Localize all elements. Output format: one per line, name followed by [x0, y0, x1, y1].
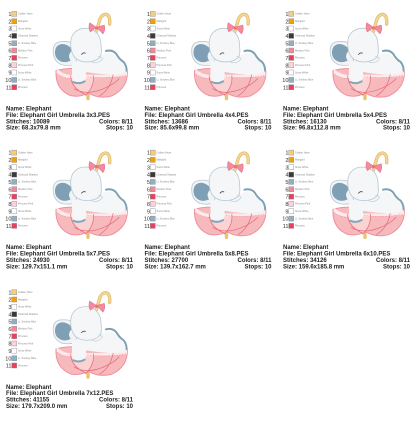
thread colour legend: 9 [8, 209, 12, 215]
thread colour legend: Golden Haze [295, 151, 310, 154]
thread colour legend: 10 [5, 78, 12, 84]
thread colour legend: Princess [156, 57, 167, 60]
thread colour legend: 6 [147, 49, 150, 55]
thread colour legend: Golden Haze [18, 151, 33, 154]
design details: Size: 159.6x185.8 mm [283, 264, 344, 270]
thread colour legend: Princess [156, 195, 167, 198]
thread colour legend: 9 [147, 209, 150, 215]
thread colour legend: Snow White [18, 210, 32, 213]
thread colour legend: 4 [147, 173, 150, 179]
thread colour legend: Golden Haze [18, 13, 33, 16]
design details: Colors: 8/11 [237, 119, 272, 125]
embroidery: elephant in umbrella [192, 153, 266, 237]
design details: Name: Elephant [6, 245, 51, 251]
design details [6, 385, 134, 410]
thread colour legend: 3 [147, 27, 150, 33]
thread colour legend: 1 [8, 290, 12, 296]
thread colour legend: 5 [285, 41, 288, 47]
thread colour legend: Lt. Smokey Blue [18, 357, 37, 360]
thread colour legend: Princess Pink [18, 203, 34, 206]
thread colour legend: Snow White [18, 350, 32, 353]
design details: Stitches: 34126 [283, 258, 327, 264]
design details: Stops: 10 [106, 404, 134, 410]
thread colour legend: Charcoal Shadow [18, 313, 38, 316]
thread colour legend: Golden Haze [156, 151, 172, 154]
thread colour legend [5, 11, 38, 91]
panel: Elephant Girl Umbrella 3x3 [5, 11, 134, 132]
thread colour legend: 1 [8, 12, 12, 18]
thread colour legend: Snow White [156, 166, 170, 169]
thread colour legend: Princess [18, 86, 28, 89]
thread colour legend: Lt. Smokey Blue [18, 320, 37, 323]
thread colour legend: 3 [8, 305, 12, 311]
thread colour legend: 8 [285, 63, 288, 69]
thread colour legend: Lt. Smokey Blue [18, 79, 37, 82]
thread colour legend: Snow White [295, 71, 309, 74]
design details [144, 106, 272, 132]
panel: Elephant Girl Umbrella 5x7 [5, 150, 134, 270]
thread colour legend: Princess [156, 86, 167, 89]
design details: Stops: 10 [244, 264, 272, 270]
thread colour legend: Princess [295, 225, 305, 228]
thread colour legend: Medium Pink [18, 49, 33, 52]
thread colour legend: 4 [8, 312, 12, 318]
thread colour legend: 10 [5, 217, 12, 223]
thread colour legend: 2 [8, 19, 12, 25]
design details: Stitches: 24930 [6, 258, 50, 264]
thread colour legend: 1 [147, 151, 150, 157]
thread colour legend: Marigold [18, 20, 28, 23]
design details: File: Elephant Girl Umbrella 3x3.PES [6, 113, 110, 119]
embroidery: elephant in umbrella [330, 153, 404, 237]
thread colour legend: Snow White [295, 166, 309, 169]
thread colour legend: Marigold [295, 20, 305, 23]
panel: Elephant Girl Umbrella 6x10 [282, 150, 411, 270]
thread colour legend: Princess [156, 225, 167, 228]
thread colour legend: 10 [282, 217, 288, 223]
thread colour legend: Marigold [156, 20, 167, 23]
thread colour legend: 11 [283, 85, 288, 91]
thread colour legend: Princess Pink [18, 342, 34, 345]
design details: Colors: 8/11 [237, 258, 272, 264]
thread colour legend: Medium Pink [18, 188, 33, 191]
thread colour legend: Snow White [295, 27, 309, 30]
design details: Size: 96.8x112.8 mm [283, 126, 341, 132]
thread colour legend [282, 150, 315, 230]
design details: Stitches: 13686 [144, 119, 189, 125]
thread colour legend: 9 [147, 71, 150, 77]
thread colour legend: 9 [8, 349, 12, 355]
thread colour legend: 7 [147, 195, 150, 201]
thread colour legend: Snow White [156, 71, 170, 74]
thread colour legend [5, 150, 38, 230]
design details: Stops: 10 [106, 264, 134, 270]
thread colour legend: 10 [144, 217, 150, 223]
design details: File: Elephant Girl Umbrella 5x4.PES [283, 113, 387, 119]
design details: Size: 85.6x99.8 mm [144, 126, 199, 132]
design details: Colors: 8/11 [99, 119, 134, 125]
thread colour legend: 6 [8, 187, 12, 193]
thread colour legend [144, 150, 176, 230]
thread colour legend: Snow White [18, 166, 32, 169]
thread colour legend: 6 [285, 187, 288, 193]
thread colour legend: Charcoal Shadow [295, 35, 315, 38]
panel: Elephant Girl Umbrella 5x4 [282, 11, 411, 132]
thread colour legend: 8 [147, 63, 150, 69]
thread colour legend: 2 [285, 19, 288, 25]
thread colour legend [144, 11, 176, 91]
thread colour legend: Charcoal Shadow [295, 173, 315, 176]
thread colour legend: 9 [285, 71, 288, 77]
thread colour legend: 1 [285, 12, 288, 18]
thread colour legend: 8 [8, 202, 12, 208]
thread colour legend: Charcoal Shadow [18, 173, 38, 176]
panel: Elephant Girl Umbrella 5x8 [144, 150, 272, 270]
thread colour legend: 2 [285, 158, 288, 164]
thread colour legend: 4 [8, 173, 12, 179]
thread colour legend: Princess [18, 57, 28, 60]
thread colour legend: Princess [295, 195, 305, 198]
thread colour legend: 3 [285, 27, 288, 33]
thread colour legend: Snow White [156, 210, 170, 213]
thread colour legend: Golden Haze [295, 13, 310, 16]
thread colour legend: 10 [144, 78, 150, 84]
design details: File: Elephant Girl Umbrella 5x7.PES [6, 252, 110, 258]
thread colour legend: 3 [147, 165, 150, 171]
thread colour legend: Lt. Smokey Blue [295, 181, 314, 184]
thread colour legend: 4 [8, 34, 12, 40]
thread colour legend: Princess Pink [295, 64, 311, 67]
design details: File: Elephant Girl Umbrella 7x12.PES [6, 391, 113, 397]
thread colour legend: 1 [8, 151, 12, 157]
thread colour legend: 4 [285, 173, 288, 179]
thread colour legend: 1 [285, 151, 288, 157]
thread colour legend: Charcoal Shadow [18, 35, 38, 38]
thread colour legend: Medium Pink [18, 328, 33, 331]
design details: Colors: 8/11 [376, 258, 411, 264]
design details: Stitches: 41155 [6, 398, 50, 404]
thread colour legend: 6 [147, 187, 150, 193]
design details [6, 245, 134, 270]
design details: Size: 179.7x209.0 mm [6, 404, 67, 410]
design details [283, 106, 411, 132]
thread colour legend: Medium Pink [295, 49, 310, 52]
thread colour legend: Lt. Smokey Blue [156, 79, 175, 82]
thread colour legend: Medium Pink [295, 188, 310, 191]
design details: Name: Elephant [6, 385, 51, 391]
thread colour legend: 4 [147, 34, 150, 40]
thread colour legend: 3 [285, 165, 288, 171]
panel: Elephant Girl Umbrella 4x4 [144, 11, 272, 132]
thread colour legend: 6 [8, 49, 12, 55]
thread colour legend: Marigold [18, 298, 28, 301]
design details: Name: Elephant [283, 106, 328, 112]
design details: Size: 139.7x162.7 mm [144, 264, 206, 270]
thread colour legend: Golden Haze [18, 291, 33, 294]
thread colour legend: 7 [8, 195, 12, 201]
design details: Name: Elephant [144, 245, 190, 251]
thread colour legend: 5 [285, 180, 288, 186]
thread colour legend: 9 [285, 209, 288, 215]
thread colour legend [5, 290, 38, 370]
thread colour legend: Snow White [295, 210, 309, 213]
thread colour legend: Marigold [156, 159, 167, 162]
thread colour legend: Princess Pink [156, 64, 172, 67]
thread colour legend: 8 [8, 63, 12, 69]
design details [6, 106, 134, 132]
thread colour legend: 4 [285, 34, 288, 40]
thread colour legend: Lt. Smokey Blue [156, 181, 175, 184]
design details: Size: 68.3x79.8 mm [6, 126, 61, 132]
design details: Name: Elephant [6, 106, 51, 112]
thread colour legend: Snow White [18, 306, 32, 309]
design details: Stitches: 10089 [6, 119, 50, 125]
design details: File: Elephant Girl Umbrella 4x4.PES [144, 113, 249, 119]
thread colour legend: 11 [144, 85, 150, 91]
design details: Stops: 10 [383, 264, 411, 270]
design details: File: Elephant Girl Umbrella 6x10.PES [283, 252, 390, 258]
design details [144, 245, 272, 270]
thread colour legend: 10 [282, 78, 288, 84]
design details [283, 245, 411, 270]
thread colour legend: 2 [147, 19, 150, 25]
thread colour legend: 8 [147, 202, 150, 208]
thread colour legend: Lt. Smokey Blue [18, 181, 37, 184]
thread colour legend: 11 [6, 224, 12, 230]
thread colour legend: 10 [5, 356, 12, 362]
design details: Stops: 10 [244, 126, 272, 132]
thread colour legend: 7 [285, 56, 288, 62]
panel: Elephant Girl Umbrella 7x12 [5, 290, 134, 410]
embroidery: elephant in umbrella [330, 14, 404, 99]
thread colour legend: Snow White [156, 27, 170, 30]
thread colour legend: Princess [18, 364, 28, 367]
design details: Size: 129.7x151.1 mm [6, 264, 67, 270]
design details: Colors: 8/11 [376, 119, 411, 125]
thread colour legend: 2 [8, 298, 12, 304]
embroidery: elephant in umbrella [192, 14, 266, 99]
thread colour legend: 11 [144, 224, 150, 230]
thread colour legend: 7 [8, 334, 12, 340]
thread colour legend: Lt. Smokey Blue [295, 217, 314, 220]
thread colour legend: 6 [285, 49, 288, 55]
thread colour legend: Princess [295, 86, 305, 89]
thread colour legend: Princess [18, 335, 28, 338]
thread colour legend: Princess Pink [18, 64, 34, 67]
thread colour legend: 11 [283, 224, 288, 230]
thread colour legend: 7 [147, 56, 150, 62]
thread colour legend: 11 [6, 85, 12, 91]
thread colour legend: Charcoal Shadow [156, 173, 176, 176]
thread colour legend: Lt. Smokey Blue [295, 42, 314, 45]
thread colour legend: Lt. Smokey Blue [295, 79, 314, 82]
thread colour legend: Lt. Smokey Blue [156, 217, 175, 220]
design details: Colors: 8/11 [99, 258, 134, 264]
thread colour legend: 8 [285, 202, 288, 208]
thread colour legend: 5 [8, 41, 12, 47]
thread colour legend: Lt. Smokey Blue [156, 42, 175, 45]
thread colour legend: 3 [8, 165, 12, 171]
thread colour legend: 9 [8, 71, 12, 77]
design details: Name: Elephant [144, 106, 190, 112]
thread colour legend: 7 [285, 195, 288, 201]
design details: Stops: 10 [383, 126, 411, 132]
embroidery: elephant in umbrella [53, 293, 127, 377]
thread colour legend: 2 [8, 158, 12, 164]
thread colour legend: 5 [8, 320, 12, 326]
design details: File: Elephant Girl Umbrella 5x8.PES [144, 252, 249, 258]
thread colour legend: 7 [8, 56, 12, 62]
design details: Stitches: 16130 [283, 119, 327, 125]
embroidery: elephant in umbrella [53, 14, 127, 99]
thread colour legend: Snow White [18, 71, 32, 74]
thread colour legend: 3 [8, 27, 12, 33]
thread colour legend: 5 [147, 41, 150, 47]
thread colour legend: 6 [8, 327, 12, 333]
thread colour legend: Lt. Smokey Blue [18, 42, 37, 45]
thread colour legend: 8 [8, 342, 12, 348]
thread colour legend: Lt. Smokey Blue [18, 217, 37, 220]
design details: Stops: 10 [106, 126, 134, 132]
thread colour legend [282, 11, 315, 91]
thread colour legend: 11 [6, 364, 12, 370]
thread colour legend: Marigold [18, 159, 28, 162]
thread colour legend: Princess [295, 57, 305, 60]
embroidery: elephant in umbrella [53, 153, 127, 237]
thread colour legend: Medium Pink [156, 188, 172, 191]
thread colour legend: Princess Pink [156, 203, 172, 206]
thread colour legend: Princess [18, 195, 28, 198]
design details: Name: Elephant [283, 245, 328, 251]
thread colour legend: Golden Haze [156, 13, 172, 16]
thread colour legend: Snow White [18, 27, 32, 30]
design details: Colors: 8/11 [99, 398, 134, 404]
thread colour legend: Princess [18, 225, 28, 228]
thread colour legend: 1 [147, 12, 150, 18]
thread colour legend: 2 [147, 158, 150, 164]
design details: Stitches: 27700 [144, 258, 189, 264]
thread colour legend: Marigold [295, 159, 305, 162]
thread colour legend: 5 [147, 180, 150, 186]
thread colour legend: Charcoal Shadow [156, 35, 176, 38]
thread colour legend: 5 [8, 180, 12, 186]
thread colour legend: Medium Pink [156, 49, 172, 52]
thread colour legend: Princess Pink [295, 203, 311, 206]
